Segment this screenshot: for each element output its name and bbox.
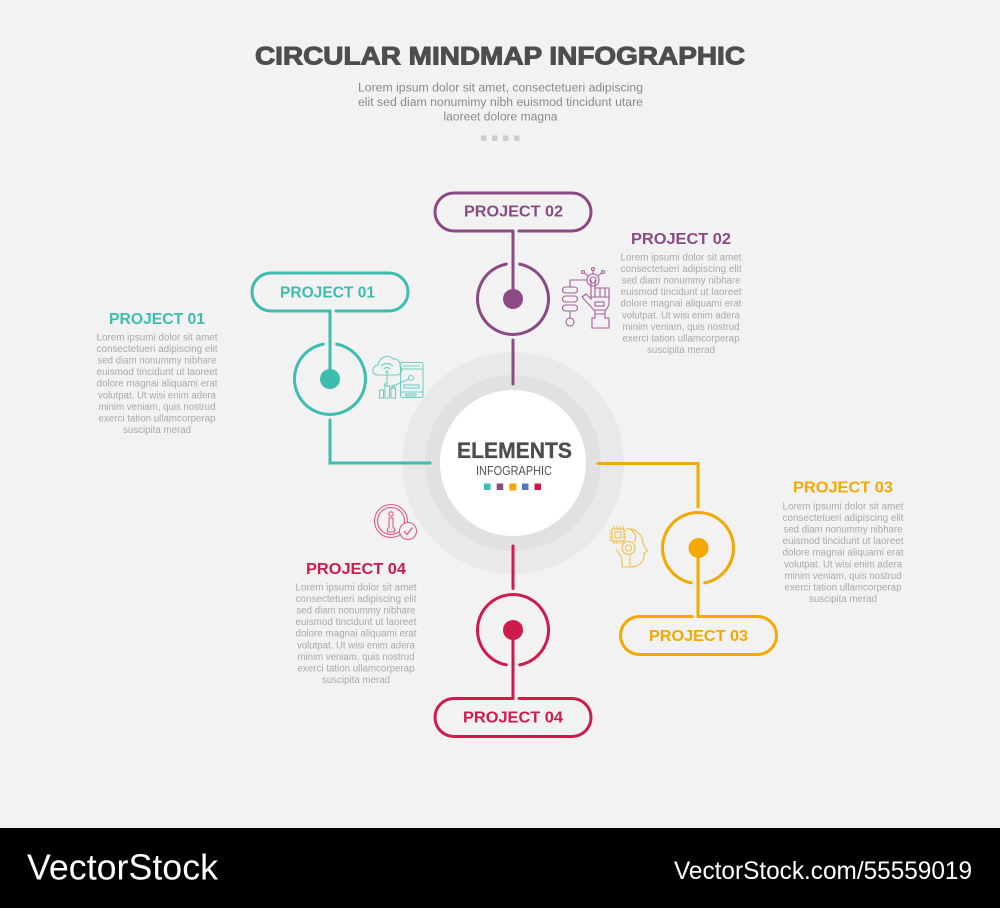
title: CIRCULAR MINDMAP INFOGRAPHIC — [255, 42, 745, 70]
project 03 stem — [696, 548, 700, 616]
subtitle text: laoreet dolore magna — [444, 110, 558, 124]
subtitle text — [358, 80, 643, 124]
project 04 stem — [512, 630, 514, 698]
subtitle text: Lorem ipsum dolor sit amet, consectetueri adipiscing — [358, 80, 643, 94]
project 02 pill label: PROJECT 02 — [464, 204, 563, 221]
title separator dots — [481, 136, 520, 141]
project 04 body: sed diam nonummy nibhare — [296, 606, 416, 617]
project 02 body: sed diam nonummy nibhare — [622, 276, 741, 287]
hub subheading: INFOGRAPHIC — [476, 463, 552, 478]
project 02 body: exerci tation ullamcorperap — [622, 333, 740, 344]
project 04 node — [435, 546, 591, 736]
project 02 body: euismod tincidunt ut laoreet — [620, 287, 742, 298]
project 04 body: minim veniam, quis nostrud — [298, 652, 414, 663]
project 01 body: euismod tincidunt ut laoreet — [96, 367, 218, 378]
project 04 text block — [296, 561, 417, 686]
project 04 body: suscipita merad — [322, 675, 390, 686]
project 04 body: exerci tation ullamcorperap — [298, 663, 415, 674]
project 04 dot — [503, 620, 523, 640]
central hub circles — [402, 352, 624, 574]
project 04 connector — [512, 546, 514, 588]
project 02 stem — [512, 231, 514, 299]
project 01 text block — [96, 311, 218, 436]
project 03 body: consectetueri adipiscing elit — [782, 513, 904, 524]
project 03 body: euismod tincidunt ut laoreet — [782, 536, 904, 547]
project 01 ring — [294, 344, 366, 414]
watermark footer — [0, 828, 1000, 908]
project 03 ring — [663, 513, 734, 583]
project 04 body — [296, 582, 417, 686]
project 02 pill — [435, 193, 591, 231]
project 03 body: volutpat. Ut wisi enim adera — [784, 559, 902, 570]
project 04 ring — [478, 595, 548, 665]
project 02 body: minim veniam, quis nostrud — [622, 322, 740, 333]
project 01 dot — [320, 369, 340, 389]
watermark logo: VectorStock — [27, 846, 219, 888]
hub heading: ELEMENTS — [457, 438, 572, 463]
project 02 dot — [503, 289, 523, 309]
project 01 body: exerci tation ullamcorperap — [98, 413, 216, 424]
project 04 body: consectetueri adipiscing elit — [296, 594, 417, 605]
icon: info with check — [374, 504, 416, 540]
project 01 pill label: PROJECT 01 — [280, 284, 375, 302]
project 03 node — [598, 464, 776, 654]
project 02 body: Lorem ipsumi dolor sit amet — [620, 252, 742, 264]
icon: head with chip — [609, 526, 648, 567]
project 03 dot — [688, 538, 708, 558]
icon: cloud and phone — [373, 356, 423, 398]
project 04 body: volutpat. Ut wisi enim adera — [297, 640, 415, 651]
project 01 connector — [330, 420, 430, 463]
project 01 stem — [328, 311, 332, 379]
project 03 body: sed diam nonummy nibhare — [784, 525, 903, 536]
project 02 body: dolore magnai aliquami erat — [620, 299, 742, 310]
project 03 body: suscipita merad — [809, 594, 877, 605]
project 03 pill label: PROJECT 03 — [649, 628, 748, 645]
project 03 body: dolore magnai aliquami erat — [782, 548, 904, 559]
project 03 connector — [598, 464, 698, 507]
project 04 body: euismod tincidunt ut laoreet — [296, 617, 417, 628]
project 03 pill — [620, 616, 776, 654]
project 01 pill — [252, 273, 408, 311]
subtitle text: elit sed diam nonumimy nibh euismod tincidunt utare — [358, 95, 643, 109]
project 02 ring — [478, 264, 548, 334]
project 01 heading: PROJECT 01 — [109, 311, 205, 328]
project 01 node — [252, 273, 430, 463]
project 02 body: consectetueri adipiscing elit — [620, 264, 742, 275]
project 02 text block — [620, 231, 742, 356]
project 01 body — [96, 332, 218, 436]
project 03 heading: PROJECT 03 — [793, 480, 893, 496]
project 03 text block — [782, 480, 904, 605]
project 02 body — [620, 252, 742, 356]
project 03 body — [782, 502, 904, 605]
project 03 body: minim veniam, quis nostrud — [784, 571, 902, 582]
icon: robot hand — [562, 268, 609, 328]
project 04 body: Lorem ipsumi dolor sit amet — [296, 582, 417, 594]
project 01 body: Lorem ipsumi dolor sit amet — [96, 332, 218, 344]
project 03 body: Lorem ipsumi dolor sit amet — [782, 502, 904, 512]
project 01 body: minim veniam, quis nostrud — [98, 402, 216, 413]
project 02 heading: PROJECT 02 — [631, 231, 731, 248]
project 04 heading: PROJECT 04 — [306, 561, 406, 578]
project 04 pill label: PROJECT 04 — [463, 710, 563, 727]
project 01 body: consectetueri adipiscing elit — [96, 344, 218, 355]
project 02 node — [435, 193, 591, 384]
project 01 body: dolore magnai aliquami erat — [96, 379, 218, 390]
project 01 body: sed diam nonummy nibhare — [98, 356, 217, 367]
project 02 body: suscipita merad — [647, 345, 715, 356]
project 04 pill — [435, 698, 591, 736]
project 04 body: dolore magnai aliquami erat — [296, 629, 417, 640]
project 03 body: exerci tation ullamcorperap — [784, 582, 902, 593]
watermark url: VectorStock.com/55559019 — [674, 857, 972, 885]
hub colour squares — [484, 484, 541, 490]
project 01 body: suscipita merad — [123, 425, 191, 436]
project 02 body: volutpat. Ut wisi enim adera — [622, 310, 740, 321]
project 02 connector — [512, 340, 514, 384]
project 01 body: volutpat. Ut wisi enim adera — [98, 390, 216, 401]
